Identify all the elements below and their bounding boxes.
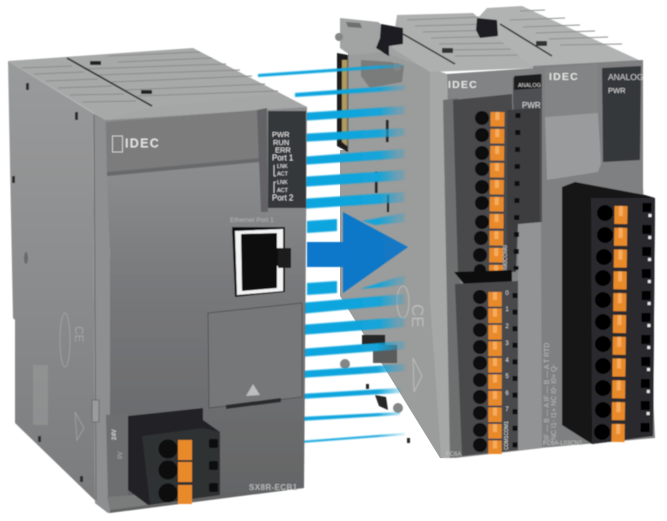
light streaks	[258, 64, 405, 443]
terminal block: module 1 lower: 2	[505, 324, 509, 330]
power terminal connector	[128, 408, 220, 505]
LED panel: Port 2	[272, 194, 294, 202]
bracket box outline	[361, 60, 404, 88]
terminal block: module 1 lower: 0	[505, 291, 509, 297]
LED panel: module 2: ANALOG	[608, 72, 643, 82]
logo: IDEC with mark	[112, 136, 160, 152]
DIN clips	[376, 18, 498, 56]
terminal block: module 1 lower: COM1COM1	[504, 421, 510, 450]
metal bracket behind module	[337, 18, 430, 152]
module 2 upper band	[545, 64, 598, 117]
module 2 terminal labels	[544, 343, 558, 440]
dark side slots	[362, 120, 410, 443]
LED panel: Port 1	[272, 154, 294, 162]
module 1 front face	[447, 68, 542, 458]
vertical recess beside LED panel	[257, 108, 268, 212]
side marks: CE	[72, 326, 86, 343]
model label: module 2: FC6A-L03CN1	[543, 441, 583, 447]
LED panel: LNK	[277, 180, 288, 186]
LED panel: ERR	[275, 146, 291, 154]
front face	[105, 107, 307, 513]
module 1 light strip	[518, 220, 542, 450]
terminal block: module 1 upper	[453, 94, 540, 280]
module 2 terminal labels: NC I1- I1+ NC I0- I0+ Q-	[551, 363, 558, 440]
LED panel	[268, 111, 306, 208]
top face	[8, 48, 307, 120]
terminal block: module 1 lower	[455, 281, 518, 456]
module 1 chamfer strip	[430, 68, 455, 458]
device: expansion modules (right)	[335, 6, 655, 458]
module 2 top face	[476, 6, 643, 68]
LED panel: module 1	[513, 74, 542, 224]
LED panel: module 2: PWR	[608, 86, 626, 95]
device: SX8R-ECB1 communication module (left)	[8, 48, 307, 513]
side marks	[397, 286, 427, 392]
terminal label panel: 0V	[118, 452, 124, 459]
logo: IDEC with mark: IDEC	[125, 136, 160, 150]
terminal label panel: 24V	[112, 429, 118, 440]
module 1 side panel	[340, 50, 443, 458]
terminal label panel	[106, 413, 148, 510]
side screws	[335, 33, 403, 413]
module 2 terminal labels: IF — B — A IF — B — A T RTD	[544, 343, 551, 440]
LED panel: module 2	[602, 66, 643, 162]
memory cover	[208, 303, 302, 409]
terminal block: module 1 upper: COM0COM0	[503, 245, 509, 277]
model label: module 1: FC6A	[446, 452, 461, 458]
terminal block separator	[454, 270, 512, 284]
side details	[12, 83, 83, 482]
terminal block: module 1 lower: 5	[505, 374, 509, 380]
side marks: CE	[408, 304, 427, 328]
LED panel: PWR	[272, 130, 290, 139]
terminal block: module 2	[562, 182, 655, 444]
terminal block: module 1 lower: 3	[505, 341, 509, 347]
LED panel: RUN	[273, 138, 289, 147]
terminal block: module 1 lower: 4	[505, 358, 509, 364]
logo: IDEC module 1: IDEC	[448, 79, 478, 91]
LED panel: LNK	[277, 164, 288, 170]
Ethernet port RJ45	[232, 227, 291, 297]
model label: SX8R-ECB1	[249, 483, 298, 492]
upper band	[106, 110, 260, 172]
band shadow	[107, 158, 260, 176]
terminal block: module 1 lower: 6	[505, 391, 509, 397]
side marks	[33, 313, 86, 440]
LED panel: ACT	[277, 172, 289, 178]
arrow: blue transfer arrow	[307, 212, 408, 293]
side clip	[92, 400, 99, 422]
module 1 label strip	[443, 98, 462, 458]
module 2 light section	[545, 113, 601, 180]
logo: IDEC module 2: IDEC	[549, 71, 579, 83]
chamfer strip	[93, 113, 110, 513]
left side panel	[8, 61, 108, 513]
terminal block: module 1 lower: 1	[505, 307, 509, 313]
terminal block: module 1 lower: 7	[505, 407, 509, 413]
module 2 front face	[533, 60, 655, 448]
port label: Ethernet Port 1	[230, 217, 274, 224]
module 1 top face	[392, 13, 535, 72]
LED panel: module 1: ANALOG	[518, 83, 541, 89]
LED panel: ACT	[277, 188, 289, 194]
LED panel: module 1: PWR	[522, 101, 541, 110]
chamfer edge line	[94, 115, 96, 500]
